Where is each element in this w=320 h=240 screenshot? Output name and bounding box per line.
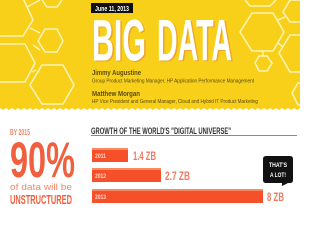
panel: yellow header xyxy=(0,0,300,110)
bar: 2013 xyxy=(92,189,284,204)
speaker: Matthew Morgan: HP Vice President and General Manager, Cloud and Hybrid IT Product Marketing xyxy=(92,99,258,105)
bar: 2011: 2011 xyxy=(95,154,107,160)
stat: 90% of data unstructured xyxy=(10,128,75,207)
bar: 2012 xyxy=(92,168,190,183)
hexagon network: left xyxy=(0,0,74,104)
date badge xyxy=(91,3,133,13)
speaker: Jimmy Augustine: Jimmy Augustine xyxy=(92,70,141,77)
callout: that's a lot: THAT'S xyxy=(269,163,287,169)
bar: 2012: 2.7 ZB xyxy=(165,169,190,183)
callout: that's a lot: A LOT! xyxy=(270,173,286,179)
speaker: Matthew Morgan: Matthew Morgan xyxy=(92,91,140,98)
bar: 2011: 1.4 ZB xyxy=(133,149,156,163)
speaker: Matthew Morgan xyxy=(92,91,258,105)
speaker: Jimmy Augustine: Group Product Marketing Manager, HP Application Performance Management xyxy=(92,78,254,84)
date badge: June 11, 2013 xyxy=(95,6,129,13)
stat: 90% of data unstructured: UNSTRUCTURED xyxy=(10,192,72,207)
bar: 2012: 2012 xyxy=(95,174,107,180)
title: BIG xyxy=(92,8,146,74)
speaker: Jimmy Augustine xyxy=(92,70,254,84)
stat: 90% of data unstructured: BY 2015 xyxy=(10,128,30,137)
stat: 90% of data unstructured: of data will be xyxy=(10,182,72,193)
stat: 90% of data unstructured: 90% xyxy=(10,132,75,188)
bar chart xyxy=(92,148,284,204)
bar: 2013: 8 ZB xyxy=(267,190,284,204)
hexagon network: right xyxy=(240,0,302,105)
bar: 2011 xyxy=(92,148,156,163)
callout: that's a lot xyxy=(263,156,293,186)
title: BIG xyxy=(94,10,148,74)
bar: 2013: 2013 xyxy=(95,195,107,201)
